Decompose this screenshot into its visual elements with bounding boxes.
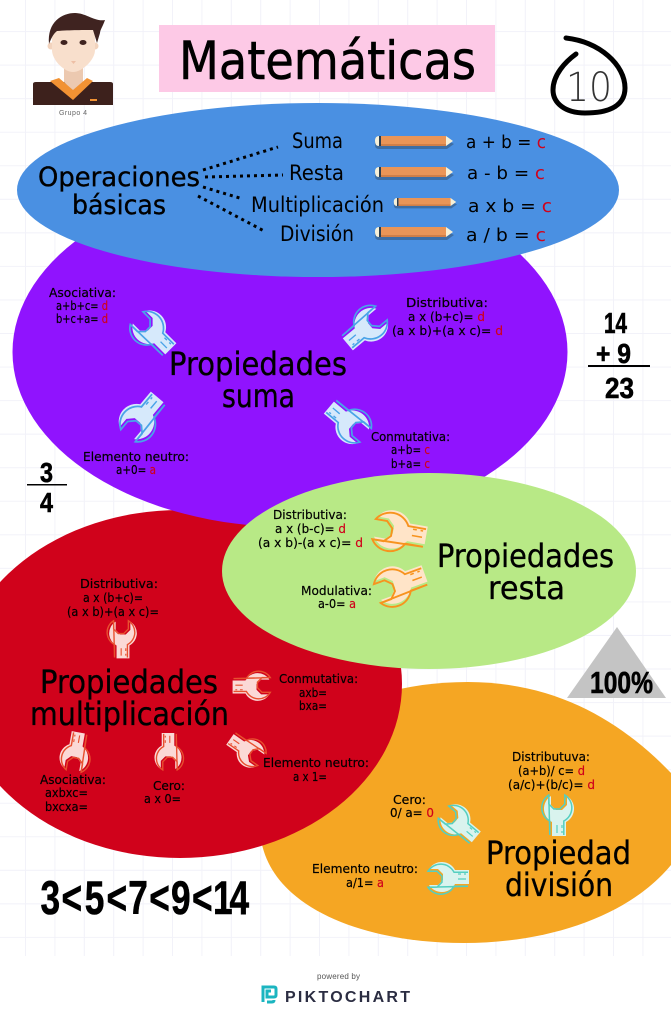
text: modulativa resta: Modulativa: bbox=[301, 584, 372, 598]
text: distributiva suma bbox=[392, 296, 503, 338]
heading: propiedades resta: resta bbox=[488, 569, 565, 607]
icon: wrench cero división bbox=[434, 799, 486, 850]
title banner: Matemáticas bbox=[179, 31, 476, 92]
text: distributiva multiplicación: Distributiva: bbox=[80, 577, 158, 591]
text: elemento neutro división: Elemento neutro: bbox=[312, 862, 418, 876]
icon: wrench conmutativa multiplicación bbox=[233, 671, 270, 701]
icon: wrench distributiva multiplicación bbox=[107, 621, 137, 658]
text: modulativa resta: a-0= a bbox=[318, 597, 356, 611]
icon: circled 10 bbox=[553, 38, 625, 113]
text: suma: Suma bbox=[292, 129, 343, 153]
math: fraction 3/4: 3 bbox=[40, 457, 53, 488]
heading: operaciones básicas: Operaciones bbox=[38, 162, 200, 193]
math: 100% triangle: 100% bbox=[590, 665, 653, 700]
panel: propiedad división bbox=[260, 682, 671, 943]
panel: operaciones básicas bbox=[17, 103, 619, 277]
text: distributiva multiplicación: a x (b+c)= bbox=[83, 591, 143, 605]
text: conmutativa multiplicación bbox=[279, 672, 358, 713]
text: conmutativa suma: Conmutativa: bbox=[371, 430, 450, 444]
heading: propiedad división: división bbox=[505, 866, 613, 904]
text: distributiva multiplicación: (a x b)+(a x c)= bbox=[67, 605, 159, 619]
heading: propiedad división bbox=[486, 834, 631, 904]
panel: propiedades suma bbox=[12, 177, 568, 527]
heading: propiedades resta: Propiedades bbox=[437, 537, 614, 575]
text: multiplicación: Multiplicación bbox=[251, 193, 384, 217]
text: resta: Resta bbox=[289, 161, 344, 185]
icon: wrench distributiva suma bbox=[335, 300, 394, 357]
text: asociativa suma: a+b+c= d bbox=[56, 299, 108, 313]
heading: propiedades suma bbox=[169, 345, 347, 415]
icon: wrench elemento neutro división bbox=[428, 862, 469, 894]
text: asociativa multiplicación: Asociativa: bbox=[40, 773, 106, 787]
text: cero multiplicación: a x 0= bbox=[144, 792, 181, 806]
text: conmutativa suma: b+a= c bbox=[391, 457, 430, 471]
text: distributiva resta: Distributiva: bbox=[273, 508, 347, 522]
text: asociativa suma: b+c+a= d bbox=[56, 312, 108, 326]
text: elemento neutro suma: a+0= a bbox=[116, 463, 156, 477]
text: asociativa multiplicación: bxcxa= bbox=[45, 800, 88, 814]
text: elemento neutro suma: Elemento neutro: bbox=[83, 450, 189, 464]
text: distributiva suma: a x (b+c)= d bbox=[408, 310, 485, 324]
heading: propiedad división: Propiedad bbox=[486, 834, 631, 872]
text: elemento neutro multiplicación: a x 1= bbox=[293, 770, 327, 784]
text: elemento neutro división bbox=[312, 862, 418, 890]
text: cero división bbox=[390, 793, 434, 820]
text: elemento neutro división: a/1= a bbox=[346, 876, 384, 890]
icon: wrench conmutativa suma bbox=[318, 393, 376, 450]
text: distributiva suma: (a x b)+(a x c)= d bbox=[392, 324, 503, 338]
caption: grupo 4: Grupo 4 bbox=[59, 110, 87, 117]
text: cero multiplicación: Cero: bbox=[153, 779, 185, 793]
icon: pencil división bbox=[375, 227, 454, 240]
panel: propiedades multiplicación bbox=[0, 510, 402, 858]
icon: pencil suma bbox=[375, 136, 454, 149]
formula: resta: a - b = c bbox=[467, 163, 545, 184]
math: 100% triangle bbox=[567, 627, 666, 700]
text: conmutativa multiplicación: bxa= bbox=[299, 699, 327, 713]
heading: operaciones básicas: básicas bbox=[72, 190, 166, 221]
math: suma 14 + 9 = 23 bbox=[588, 308, 650, 405]
text: elemento neutro suma bbox=[83, 450, 189, 477]
text: cero división: 0/ a= 0 bbox=[390, 806, 434, 820]
text: conmutativa multiplicación: axb= bbox=[299, 686, 327, 700]
math: suma 14 + 9 = 23: + 9 bbox=[596, 338, 631, 369]
text: distributiva división bbox=[508, 750, 595, 792]
text: asociativa multiplicación bbox=[40, 773, 106, 814]
text: cero multiplicación bbox=[144, 779, 185, 806]
text: división: División bbox=[280, 222, 354, 246]
icon: wrench modulativa resta bbox=[370, 556, 432, 611]
text: distributiva resta: a x (b-c)= d bbox=[275, 522, 346, 536]
text: distributiva división: (a+b)/ c= d bbox=[518, 764, 585, 778]
icon: avatar bbox=[33, 13, 113, 105]
heading: propiedades resta bbox=[437, 537, 614, 607]
icon: pencil multiplicación bbox=[394, 198, 457, 208]
formula: suma: a + b = c bbox=[466, 132, 546, 153]
dotted connectors bbox=[198, 147, 283, 232]
icon: wrench distributiva división bbox=[542, 795, 574, 836]
text: distributiva suma: Distributiva: bbox=[406, 296, 488, 310]
text: distributiva resta bbox=[258, 508, 363, 550]
text: distributiva multiplicación bbox=[67, 577, 159, 619]
icon: wrench cero multiplicación bbox=[154, 733, 184, 770]
text: asociativa suma bbox=[49, 286, 116, 326]
formula: multiplicación: a x b = c bbox=[468, 196, 552, 217]
heading: operaciones básicas bbox=[38, 162, 200, 221]
text: elemento neutro multiplicación: Elemento neutro: bbox=[263, 756, 369, 770]
footer: powered by piktochart: PIKTOCHART bbox=[285, 989, 410, 1006]
text: elemento neutro multiplicación bbox=[263, 756, 369, 784]
footer: powered by piktochart: powered by bbox=[317, 972, 360, 981]
icon: wrench asociativa suma bbox=[125, 304, 183, 362]
text: modulativa resta bbox=[301, 584, 372, 611]
formula: división: a / b = c bbox=[466, 225, 546, 246]
heading: propiedades suma: suma bbox=[222, 377, 295, 415]
math: fraction 3/4: 4 bbox=[40, 487, 53, 518]
heading: propiedades multiplicación: multiplicación bbox=[30, 695, 229, 733]
text: conmutativa suma: a+b= c bbox=[391, 443, 430, 457]
text: distributiva resta: (a x b)-(a x c)= d bbox=[258, 536, 363, 550]
math: inequality chain: 3<5<7<9<14 bbox=[40, 871, 249, 924]
icon: wrench distributiva resta bbox=[371, 507, 430, 557]
icon: wrench elemento neutro multiplicación bbox=[222, 726, 270, 772]
text: asociativa suma: Asociativa: bbox=[49, 286, 116, 300]
text: conmutativa multiplicación: Conmutativa: bbox=[279, 672, 358, 686]
math: suma 14 + 9 = 23: 14 bbox=[604, 308, 627, 340]
heading: propiedades multiplicación bbox=[30, 663, 229, 733]
heading: propiedades suma: Propiedades bbox=[169, 345, 347, 383]
math: suma 14 + 9 = 23: 23 bbox=[605, 373, 634, 405]
text: conmutativa suma bbox=[371, 430, 450, 471]
icon: wrench elemento neutro suma bbox=[112, 386, 173, 447]
icon: wrench asociativa multiplicación bbox=[57, 730, 94, 773]
icon: circled 10: 10 bbox=[566, 65, 612, 111]
text: asociativa multiplicación: axbxc= bbox=[45, 786, 88, 800]
footer: powered by piktochart bbox=[263, 972, 410, 1006]
text: cero división: Cero: bbox=[393, 793, 426, 807]
heading: propiedades multiplicación: Propiedades bbox=[40, 663, 218, 701]
icon: pencil resta bbox=[375, 167, 454, 180]
math: fraction 3/4 bbox=[27, 457, 67, 518]
panel: propiedades resta bbox=[222, 473, 636, 669]
text: distributiva división: (a/c)+(b/c)= d bbox=[508, 778, 595, 792]
text: distributiva división: Distributuva: bbox=[512, 750, 590, 764]
